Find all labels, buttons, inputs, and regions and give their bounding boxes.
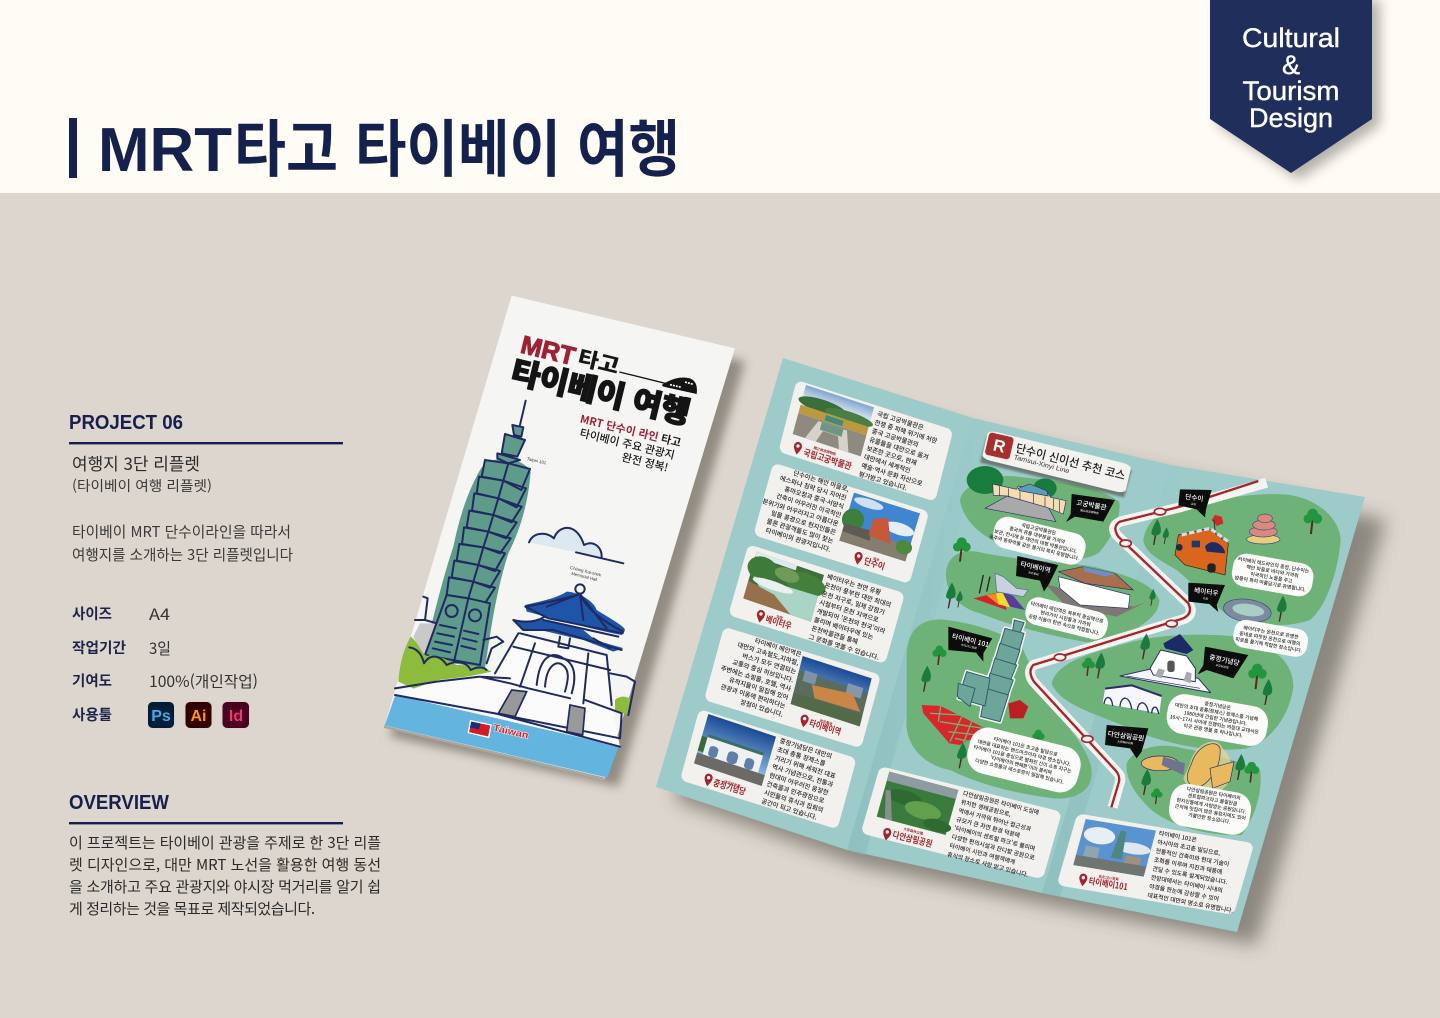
project description [72, 521, 293, 565]
spec rows: 3일 [149, 637, 171, 659]
pin and name: 다안삼림공원 [891, 828, 934, 850]
card text: 보존한 곳으로, 현재 [866, 443, 918, 467]
map label: memorial hall: 중정기념당 [1209, 651, 1241, 667]
card text: 베이터우는 천연 유황 [826, 572, 882, 597]
map label: station [1016, 556, 1058, 592]
card: Chiang Kai-shek Memorial Hall [680, 709, 857, 829]
cover subtitle [572, 411, 683, 477]
map label: Tamsui: 단수이 [1185, 491, 1204, 503]
pin and name [756, 609, 793, 632]
cover title: MRT [518, 331, 578, 371]
map label: Daan park: 다안삼림공원 [1107, 728, 1145, 743]
card: Beitou [728, 544, 905, 664]
card text: 시민들의 휴식과 집회의 [763, 788, 825, 814]
bubble: Taipei 101: 대만을 대표하는 랜드마크이자 야경 명소입니다. [977, 738, 1072, 768]
icon: InDesign [222, 702, 250, 728]
bubble: Taipei 101: '타이베이의 맨해튼'이라 불리며 [990, 754, 1053, 776]
bubble: palace museum: 옹주와 동화박물 같은 볼거리 특히 유명합니다. [988, 533, 1080, 562]
bubble: station: 타이베이 메인역은 북부의 중심역으로 [1030, 600, 1105, 625]
card text: 국립 고궁박물관은 [876, 409, 925, 432]
card: National Palace Museum [778, 380, 953, 502]
pin and name [703, 773, 748, 798]
overview text: 렛 디자인으로, 대만 MRT 노선을 활용한 여행 동선 [69, 854, 381, 875]
bubble: station: 공항 이동이 한번 속으로 적합합니다. [1027, 613, 1101, 637]
card text: 온천박물관을 통해 [810, 623, 859, 646]
map label: memorial hall [1198, 647, 1248, 678]
card text: 대만의 고속철도,지하철, [736, 640, 800, 667]
badge: Cultural & Tourism Design [1210, 0, 1380, 180]
card text: 타이베이의 관광지입니다. [765, 525, 832, 554]
card text: 유물들을 대만으로 옮겨 [868, 435, 930, 462]
illustration: red plaza grid [922, 700, 1028, 745]
bubble: station [1023, 595, 1110, 642]
card text: 건축물과 민주광장으로 [766, 779, 826, 805]
route map [906, 430, 1341, 915]
card text: 일몰 풍경으로 현지인들은 [770, 508, 837, 537]
card text: 초대 총통 장제스를 [776, 745, 827, 768]
overview text [69, 832, 381, 919]
card text: 버스가 모두 연결되는 [741, 651, 798, 676]
map title plate [980, 430, 1132, 497]
project title: 여행지 3단 리플렛 [72, 450, 200, 475]
card: Daan Forest Park [861, 766, 1062, 879]
bubble: memorial hall: 이곳 관광 명물 중 하나입니다. [1183, 722, 1244, 740]
cover subtitle: MRT 단수이 라인 타고 [578, 411, 683, 451]
card text: 전망대에서는 타이베이 시내의 [1150, 872, 1223, 895]
card text: 위치한 생태공원으로, [960, 797, 1012, 819]
pin and name [853, 551, 887, 573]
card text: 교통의 중심 허브입니다. [731, 657, 795, 684]
card: Taipei Main Station [704, 627, 881, 748]
spec rows: 기여도 [72, 670, 112, 691]
trees [921, 509, 1322, 804]
bubble: Tamsui: 밤풍이 특히 아름답기로 유명합니다. [1234, 574, 1307, 594]
card text: 평가받고 있습니다. [858, 469, 908, 493]
illustration: left background building [415, 597, 437, 623]
badge: Cultural & Tourism Design: Design [1249, 103, 1333, 133]
photo: hot spring [739, 550, 829, 624]
card text: 다양한 편의시설과 잔디밭 공원으로 [951, 832, 1036, 862]
pin and name: 北投 [776, 614, 784, 620]
card text: 시절부터 온천 지역으로 [818, 597, 880, 624]
card text: 유적지들이 밀집해 있어 [728, 675, 790, 702]
bubble: memorial hall: 1980년에 건립한 기념관입니다. [1183, 709, 1248, 727]
pin and name: 大安森林公園 [903, 826, 924, 836]
badge: Cultural & Tourism Design: Cultural [1242, 23, 1340, 53]
bubble: Taipei 101 [963, 724, 1085, 796]
map label: Daan park [1105, 725, 1148, 758]
pin and name: 淡水 [872, 556, 881, 562]
map label: Taipei 101 [948, 627, 992, 662]
illustration: rainbow plaza [973, 573, 1028, 610]
pin and name: 중정기념당 [712, 776, 748, 798]
card text: 역에서 가까워 뛰어난 접근성과 [958, 806, 1033, 833]
pin and name: 台北車站 [819, 718, 834, 726]
left panel cards [680, 380, 1062, 879]
photo: palace [789, 384, 877, 457]
bubble: Daan park: 가볼만한 장소입니다. [1188, 811, 1231, 826]
card: Tamsui [753, 462, 929, 584]
illustration: green bushes [398, 637, 632, 715]
cover subtitle: 완전 정복! [620, 449, 670, 476]
map title plate: Tamsui-Xinyi Line [1013, 454, 1070, 475]
map label: memorial hall: 中正紀念堂 [1215, 663, 1229, 670]
cover title: 타이베이 여행 [507, 346, 695, 433]
illustration: Tamsui fort [1175, 515, 1228, 575]
card text: 야경을 한눈에 감상할 수 있어 [1148, 881, 1220, 903]
icon: Photoshop [148, 702, 174, 728]
pin and name [799, 714, 843, 738]
card text: 현대미 어우러진 웅장한 [768, 770, 830, 797]
metro line [1030, 481, 1267, 807]
bubble: Beitou [1231, 618, 1310, 659]
icon: InDesign: Id [229, 708, 243, 725]
overview text: 이 프로젝트는 타이베이 관광을 주제로 한 3단 리플 [69, 832, 381, 853]
pin and name: 베이터우 [764, 612, 793, 632]
card text: 타이베이 시민과 여행객에게 [949, 840, 1016, 866]
card text: 불리며 베이터우에 있는 [813, 615, 875, 641]
bubble: memorial hall: 대만의 초대 총통(장제스) 장제스를 기념해 [1174, 701, 1259, 723]
pin and name: 國立故宮博物院 [813, 445, 837, 457]
card text: 기리기 위해 세워진 대표 [773, 753, 837, 780]
card text: 온천이 풍부한 대만 최대의 [823, 580, 893, 609]
label: Chiang Kai-shek Memorial Hall: Chiang Kai-shek [570, 565, 603, 578]
map label: palace: 國立故宮博物院 [1080, 508, 1099, 515]
bubble: Daan park: 근처에 맛집이 많은 융캉지에도 있어 [1174, 803, 1246, 822]
card text: 대표적인 대만의 명소로 유명합니다. [1147, 890, 1234, 915]
illustration: memorial hall [1120, 634, 1211, 693]
icon: Photoshop: Ps [151, 708, 171, 725]
card text: 역사 기념관으로, 전통과 [771, 762, 835, 789]
label: Taipei 101: Taipei 101 [526, 456, 547, 466]
card text: 그 문화를 엿볼 수 있습니다. [808, 632, 880, 662]
illustration: pagoda [1247, 514, 1280, 544]
pin and name: 타이베이역 [808, 716, 843, 738]
card text: 중국 고궁박물관의 [871, 426, 920, 449]
map label: Beitou: 베이터우 [1194, 584, 1219, 598]
spec rows: 사이즈 [72, 603, 112, 624]
illustration: Chiang Kai-shek Memorial Hall [395, 584, 635, 747]
card text: 온천 지구로, 일제 강점기 [821, 589, 886, 617]
photo: Tamsui fort [835, 491, 923, 562]
photo: park [877, 772, 962, 836]
card text: 에스파냐 침략 당시 지어진 [779, 473, 848, 502]
bubble: Taipei 101: 타이베이 101을 중심으로 펼쳐진 신이 쇼핑 지구는 [973, 744, 1073, 775]
card: Taipei 101 [1057, 813, 1254, 915]
map label: station: 타이베이역 [1020, 558, 1052, 575]
heading: overview: OVERVIEW [69, 792, 169, 814]
bubble: Daan park: 다안삼림공원은 타이베이의 [1186, 785, 1241, 802]
brochure cover [384, 296, 745, 787]
map green areas [906, 476, 1341, 835]
title: 타고 [234, 99, 338, 189]
card text: 휴식의 장소로 사랑 받고 있습니다. [946, 849, 1030, 879]
card text: 타이베이 101은 [1158, 828, 1198, 844]
bubble: Taipei 101: 타이베이 101은 초고층 빌딩으로 [993, 736, 1059, 758]
card text: 중정기념당은 대만의 [779, 736, 833, 760]
pin and name: 中正紀念堂 [724, 779, 742, 789]
project subtitle: (타이베이 여행 리플렛) [72, 476, 212, 496]
title: 타이베이 [355, 99, 561, 189]
icon: R line badge: R [991, 436, 1007, 457]
bubble: Beitou: 베이터우는 온천으로 유명한 [1243, 624, 1300, 641]
pin and name [793, 441, 853, 472]
cover subtitle: 타이베이 주요 관광지 [578, 425, 676, 463]
map label: Taipei 101: 台北101/世貿 [961, 642, 978, 650]
badge: Cultural & Tourism Design: Tourism [1242, 76, 1340, 106]
map label: palace: 고궁박물관 [1076, 497, 1107, 512]
bubble: Tamsui: 타이베이 레드라인의 종점, 단수이는 [1237, 555, 1310, 575]
title: 여행 [577, 99, 680, 189]
overview text: 을 소개하고 주요 관광지와 야시장 먹거리를 알기 쉽 [69, 876, 381, 897]
card text: 예술·역사 문화 자산으로 [860, 461, 924, 488]
card text: 다안삼림공원은 타이베이 도심에 [962, 788, 1040, 817]
logo: Taiwan flag [468, 721, 530, 742]
bubble: Beitou: 동네로 따뜻한 온천으로 여행의 [1239, 630, 1301, 648]
spec rows: A4 [149, 603, 170, 625]
card text: 규모가 큰 자연 환경 덕분에 [955, 814, 1021, 839]
illustration: Taipei 101 tower [413, 401, 531, 668]
card text: 아시아의 초고층 빌딩으로, [1157, 837, 1221, 858]
cover sea band [385, 696, 618, 778]
panel: project info [69, 412, 343, 728]
map label: palace [1066, 494, 1115, 522]
illustration: memorial gate [1103, 685, 1162, 714]
pin and name: 타이베이101 [1088, 874, 1129, 893]
title [69, 99, 680, 189]
bubble: palace museum: 국립고궁박물관은 [1021, 522, 1057, 537]
pin and name: 台北101/世貿 [1098, 873, 1120, 882]
spec rows [72, 603, 258, 725]
spec rows: 100%(개인작업) [149, 670, 258, 692]
illustration: Daan park sculpture [1141, 741, 1234, 792]
cover title: 타고 [575, 341, 623, 380]
card text: 분위기와 어우러지고 아름다운 [761, 496, 840, 528]
pin and name: 단수이 [862, 554, 887, 573]
icon: Illustrator: Ai [190, 708, 206, 725]
bubble: memorial hall [1164, 692, 1271, 748]
card text: 단수이는 해안 마을로, [792, 468, 850, 494]
icon: Illustrator [185, 702, 212, 728]
map label: Beitou [1188, 583, 1225, 612]
project description: 타이베이 MRT 단수이라인을 따라서 [72, 521, 291, 542]
illustration: palace museum [967, 466, 1066, 522]
bubble: Daan park [1166, 781, 1254, 837]
pin and name [882, 826, 934, 850]
map label: Beitou: 北投 [1203, 596, 1209, 601]
title: MRT [98, 116, 232, 185]
badge: Cultural & Tourism Design: & [1282, 50, 1300, 80]
photo: memorial gate [694, 714, 776, 786]
project description: 여행지를 소개하는 3단 리플렛입니다 [72, 544, 293, 565]
card text: 물론 관광객들도 많이 찾는 [766, 516, 835, 545]
bubble: palace museum: 중국의 유물 대부분을 가져와 [1008, 525, 1066, 546]
card text: 관광과 이동에 편리하다는 [720, 682, 787, 710]
card text: 건축이 어우러진 이국적인 [775, 491, 843, 519]
illustration: hot spring ring [1222, 596, 1273, 625]
map label: Daan park: 大安森林公園 [1117, 739, 1134, 745]
card text: 대만에서 세계적인 [863, 452, 912, 475]
cover paper [384, 296, 735, 780]
card text: 조화를 이루며 지진과 태풍에 [1153, 855, 1223, 876]
label: Chiang Kai-shek Memorial Hall: Memorial Hall [571, 571, 598, 582]
icon: R line badge [984, 432, 1014, 460]
bubble: station: 편리가이 시민들과 가까워 [1040, 609, 1091, 628]
card text: '타이베이의 센트럴 파크'로 불리며 [953, 823, 1036, 853]
map label: station: 台北車站 [1028, 570, 1040, 577]
photo: station [791, 656, 872, 726]
map label: Tamsui: 淡水 [1191, 502, 1197, 506]
panel: overview [69, 792, 381, 919]
icon: train [619, 372, 697, 394]
card text: 주변에는 쇼핑몰, 호텔, 역사 [720, 663, 792, 693]
card text: 전쟁 중 피해 위기에 처한 [873, 418, 939, 445]
logo: Taiwan flag: Taiwan [492, 723, 530, 742]
photo: Taipei 101 [1073, 819, 1156, 877]
illustration: station [1045, 567, 1145, 617]
card text: 공간이 되고 있습니다. [760, 796, 818, 822]
bubble: palace museum [988, 514, 1088, 567]
pin and name: 국립고궁박물관 [802, 445, 853, 472]
bubble: Tamsui: 해안 마을로 바다와 가까워 [1246, 563, 1299, 579]
map label: Tamsui [1178, 489, 1212, 517]
map title plate: 단수이 신이선 추천 코스 [1014, 439, 1128, 484]
bubble: Tamsui [1230, 552, 1316, 598]
card text: 타이베이 메인역은 [754, 636, 803, 659]
heading: project number: PROJECT 06 [69, 412, 183, 434]
card text: 장점이 있습니다. [739, 697, 784, 719]
bubble: Taipei 101: 다양한 쇼핑몰과 레스토랑이 밀집해 있습니다. [974, 757, 1065, 786]
bubble: memorial hall: 10시~17시 사이에 진행되는 의장대 교대식은 [1169, 713, 1260, 736]
bubble: Beitou: 피로를 풀기에 적합한 장소입니다. [1235, 636, 1303, 654]
pin and name [1078, 873, 1129, 893]
overview text: 게 정리하는 것을 목표로 제작되었습니다. [69, 898, 315, 919]
spec rows: 작업기간 [72, 637, 126, 658]
bubble: Daan park: 현지인들에게 사랑받는 공원입니다. [1176, 796, 1247, 816]
illustration: cloud [529, 528, 623, 563]
bubble: palace museum: 보관, 전시해 둔 대만의 대형 박물관입니다. [993, 528, 1078, 555]
card text: 전통적인 건축미와 현대 기술이 [1155, 846, 1230, 868]
bubble: Daan park: 센트럴파크라고 불릴만큼 [1187, 792, 1238, 808]
card text: 견딜 수 있도록 설계되었습니다. [1152, 864, 1229, 886]
card text: 개발되어 '온천의 천국'이라 [816, 606, 887, 636]
bubble: Tamsui: 이국적인 노을을 주고 [1250, 571, 1294, 585]
spread paper [656, 358, 1365, 932]
map label: Taipei 101: 타이베이 101 [951, 630, 990, 649]
card text: 홍마오청과 중국·서양식 [783, 484, 845, 511]
brochure inside spread [656, 358, 1386, 945]
illustration: Taipei 101 towers [957, 620, 1024, 722]
spec rows: 사용툴 [72, 704, 112, 725]
bubble: memorial hall: 중정기념당은 [1204, 700, 1232, 712]
